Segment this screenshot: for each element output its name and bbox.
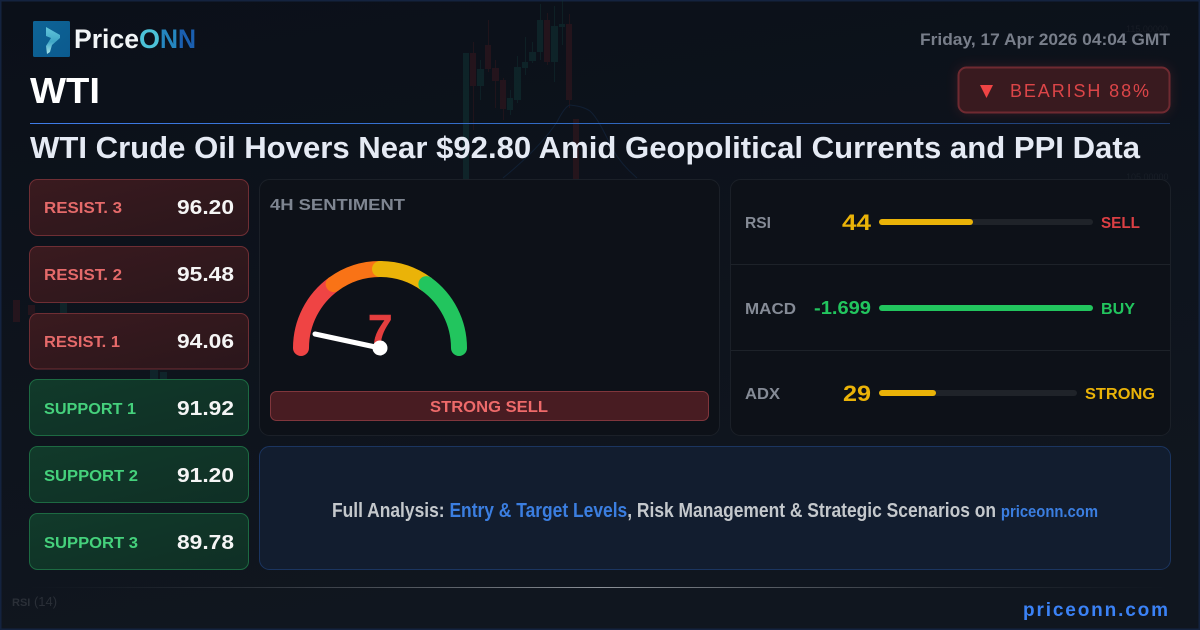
resistance 3: 96.20 (177, 197, 234, 219)
gauge arc segments (301, 269, 459, 348)
resistance 1: 94.06 (177, 331, 234, 353)
RSI row: SELL (1101, 215, 1140, 232)
RSI row (745, 210, 1140, 235)
wordmark (74, 24, 196, 54)
resistance 2: RESIST. 2 (44, 267, 122, 284)
panel: price levels (30, 180, 248, 570)
MACD row: BUY (1101, 301, 1135, 318)
support 1: SUPPORT 1 (44, 401, 136, 418)
panel heading: 4H SENTIMENT (270, 197, 405, 214)
headline: WTI Crude Oil Hovers Near $92.80 Amid Geopolitical Currents and PPI Data (30, 130, 1141, 165)
MACD row: MACD (745, 301, 796, 318)
date: Friday, 17 Apr 2026 04:04 GMT (920, 30, 1171, 49)
resistance 1 (30, 314, 248, 369)
support 2: 91.20 (177, 465, 234, 487)
RSI row: RSI (745, 215, 771, 232)
panel: technical indicators (730, 180, 1170, 436)
badge text: BEARISH 88% (1010, 81, 1149, 101)
panel: full analysis callout (260, 446, 1170, 570)
support 3: 89.78 (177, 532, 234, 554)
faint background price chart: 110.00000 (1126, 98, 1168, 108)
strong sell label: STRONG SELL (430, 399, 548, 416)
faint background price chart: 115.00000 (1126, 24, 1168, 34)
callout text: Full Analysis: Entry & Target Levels, Risk Management & Strategic Scenarios on priceonn.com (332, 500, 1098, 522)
faint RSI label: RSI (14) (12, 594, 57, 609)
support 1: 91.92 (177, 398, 234, 420)
MACD row (745, 298, 1135, 318)
MACD row: -1.699 (814, 298, 871, 318)
footer site link: priceonn.com (1023, 600, 1168, 621)
support 3 (30, 514, 248, 570)
resistance 1: RESIST. 1 (44, 334, 120, 351)
support 1 (30, 380, 248, 436)
wordmark: O (139, 24, 160, 54)
support 2 (30, 446, 248, 502)
gauge needle (315, 334, 388, 356)
resistance 2: 95.48 (177, 264, 234, 286)
logo (33, 21, 196, 57)
ADX row (745, 381, 1155, 406)
ADX row: 29 (843, 381, 871, 406)
panel: 4H sentiment (260, 180, 720, 436)
gauge value: 7 (368, 306, 392, 355)
faint background price chart: 105.00000 (1126, 172, 1169, 182)
resistance 3: RESIST. 3 (44, 200, 122, 217)
strong sell label (270, 392, 708, 420)
bearish badge (958, 67, 1170, 113)
support 3: SUPPORT 3 (44, 535, 138, 552)
wordmark: N (160, 24, 178, 54)
resistance 2 (30, 246, 248, 302)
faint background price chart (13, 0, 1169, 390)
ADX row: ADX (745, 386, 780, 403)
asset symbol: WTI (30, 70, 100, 111)
wordmark: N (178, 24, 196, 54)
icon: logo mark (33, 21, 70, 57)
wordmark: Price (74, 24, 139, 54)
support 2: SUPPORT 2 (44, 468, 138, 485)
ADX row: STRONG (1085, 386, 1155, 403)
resistance 3 (30, 180, 248, 236)
gauge (301, 269, 459, 356)
RSI row: 44 (842, 210, 872, 235)
icon: down triangle (980, 85, 993, 98)
